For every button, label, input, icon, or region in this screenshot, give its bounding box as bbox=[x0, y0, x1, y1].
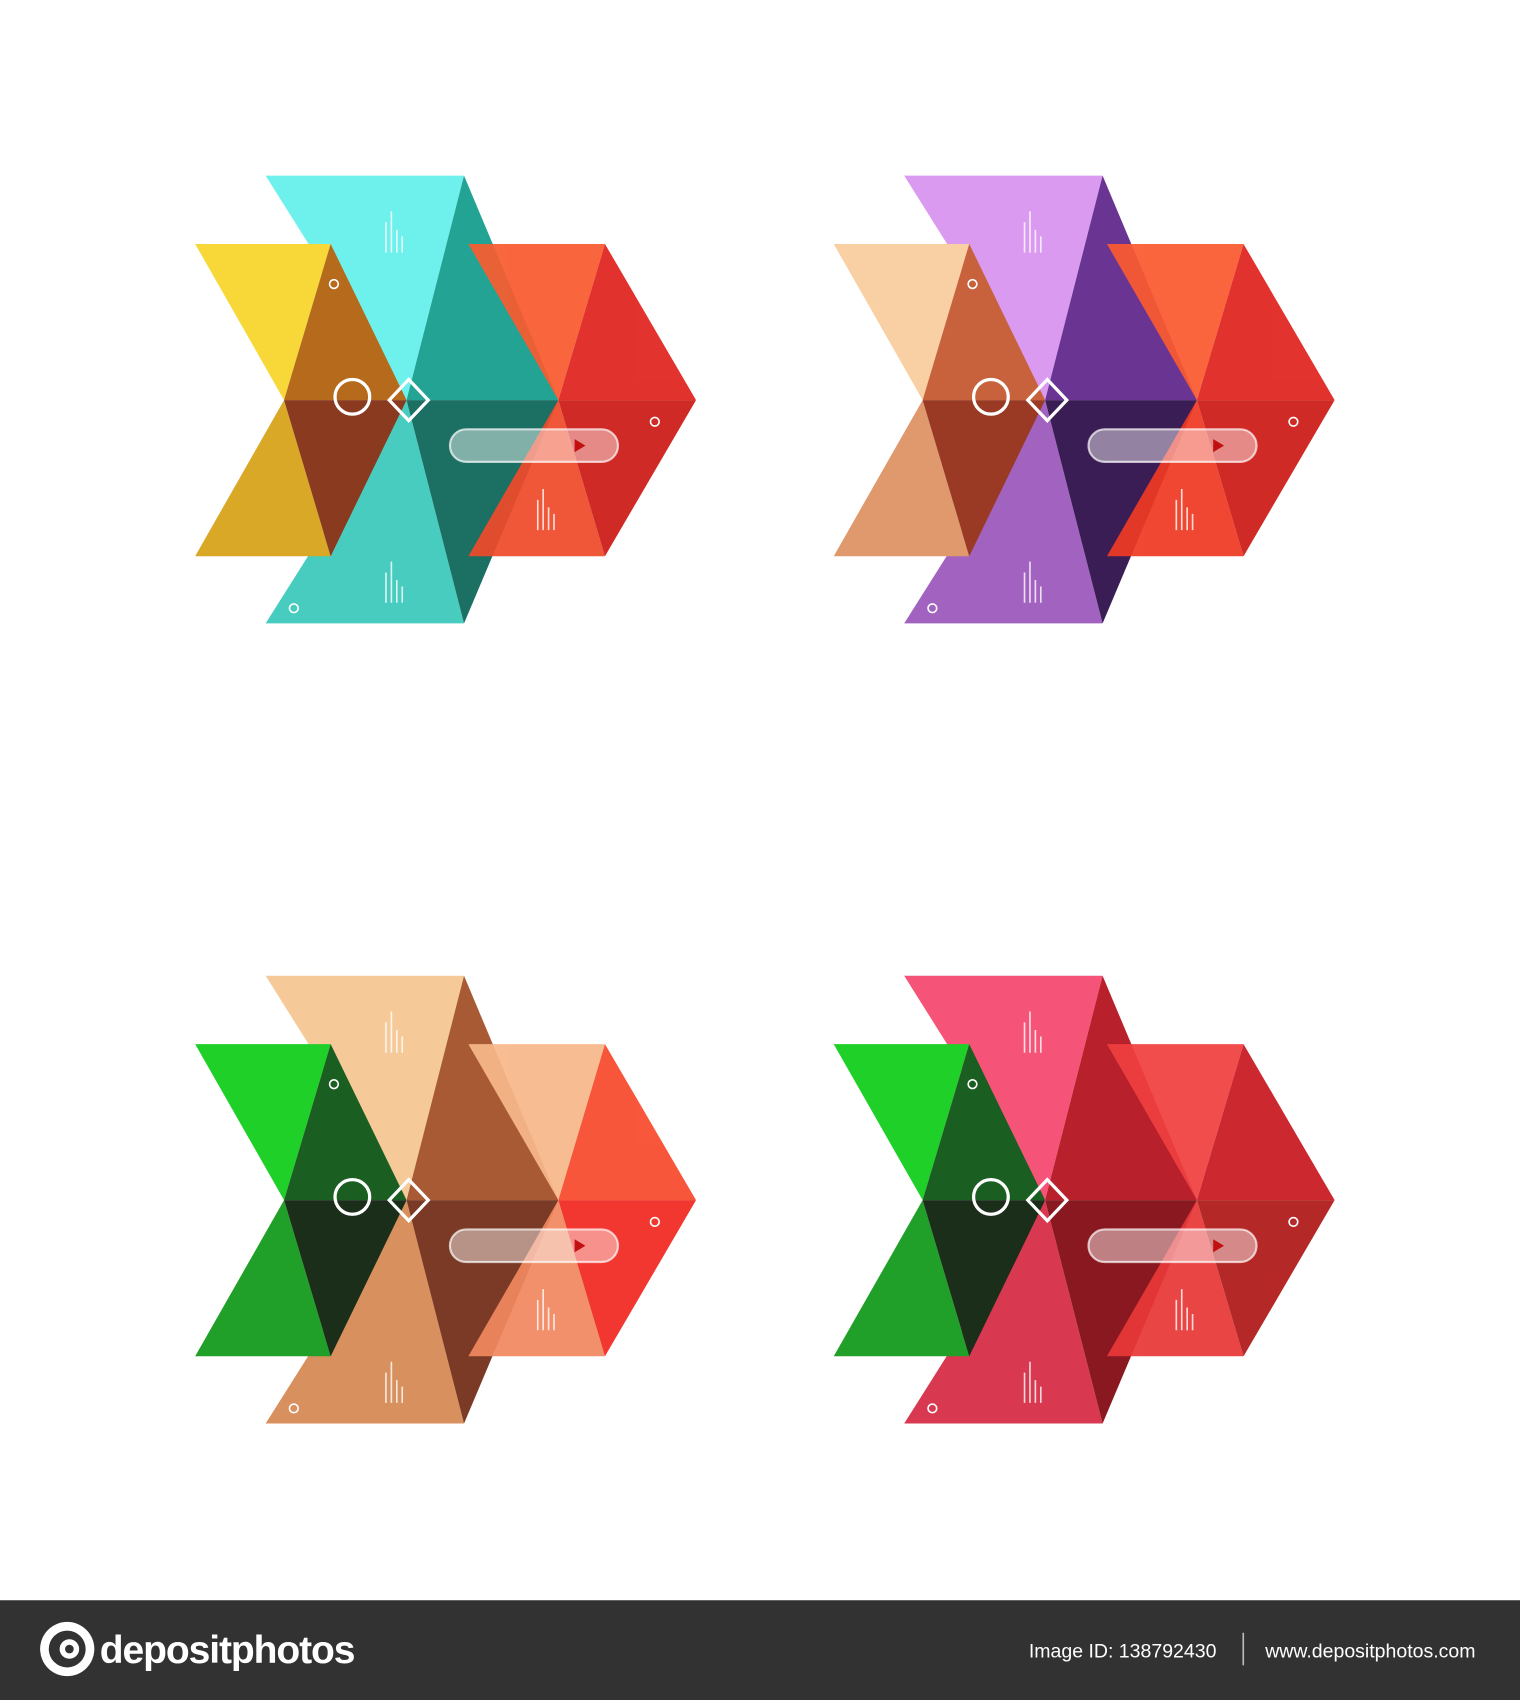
footer bar bbox=[0, 1600, 1520, 1700]
image id: Image ID: 138792430 bbox=[1029, 1641, 1217, 1663]
right chevron red bbox=[1107, 1044, 1335, 1356]
left chevron green bbox=[195, 1044, 407, 1356]
arrow group 4: green pink red bbox=[834, 976, 1335, 1424]
left chevron green bbox=[834, 1044, 1045, 1356]
arrow group 2: peach purple red bbox=[834, 176, 1335, 623]
arrow group 1: yellow teal red bbox=[195, 176, 696, 623]
right chevron red bbox=[1107, 244, 1335, 556]
middle chevron tan bbox=[266, 976, 558, 1424]
left chevron yellow bbox=[195, 244, 407, 556]
middle chevron pink bbox=[904, 976, 1197, 1424]
middle chevron purple bbox=[904, 176, 1197, 623]
right chevron red bbox=[468, 244, 696, 556]
right chevron orange bbox=[468, 1044, 696, 1356]
middle chevron teal bbox=[266, 176, 558, 623]
logo text: depositphotos bbox=[100, 1629, 355, 1672]
website: www.depositphotos.com bbox=[1264, 1641, 1476, 1663]
left chevron peach bbox=[834, 244, 1045, 556]
icon: depositphotos logo bbox=[40, 1622, 94, 1676]
arrow group 3: green tan orange bbox=[195, 976, 696, 1424]
